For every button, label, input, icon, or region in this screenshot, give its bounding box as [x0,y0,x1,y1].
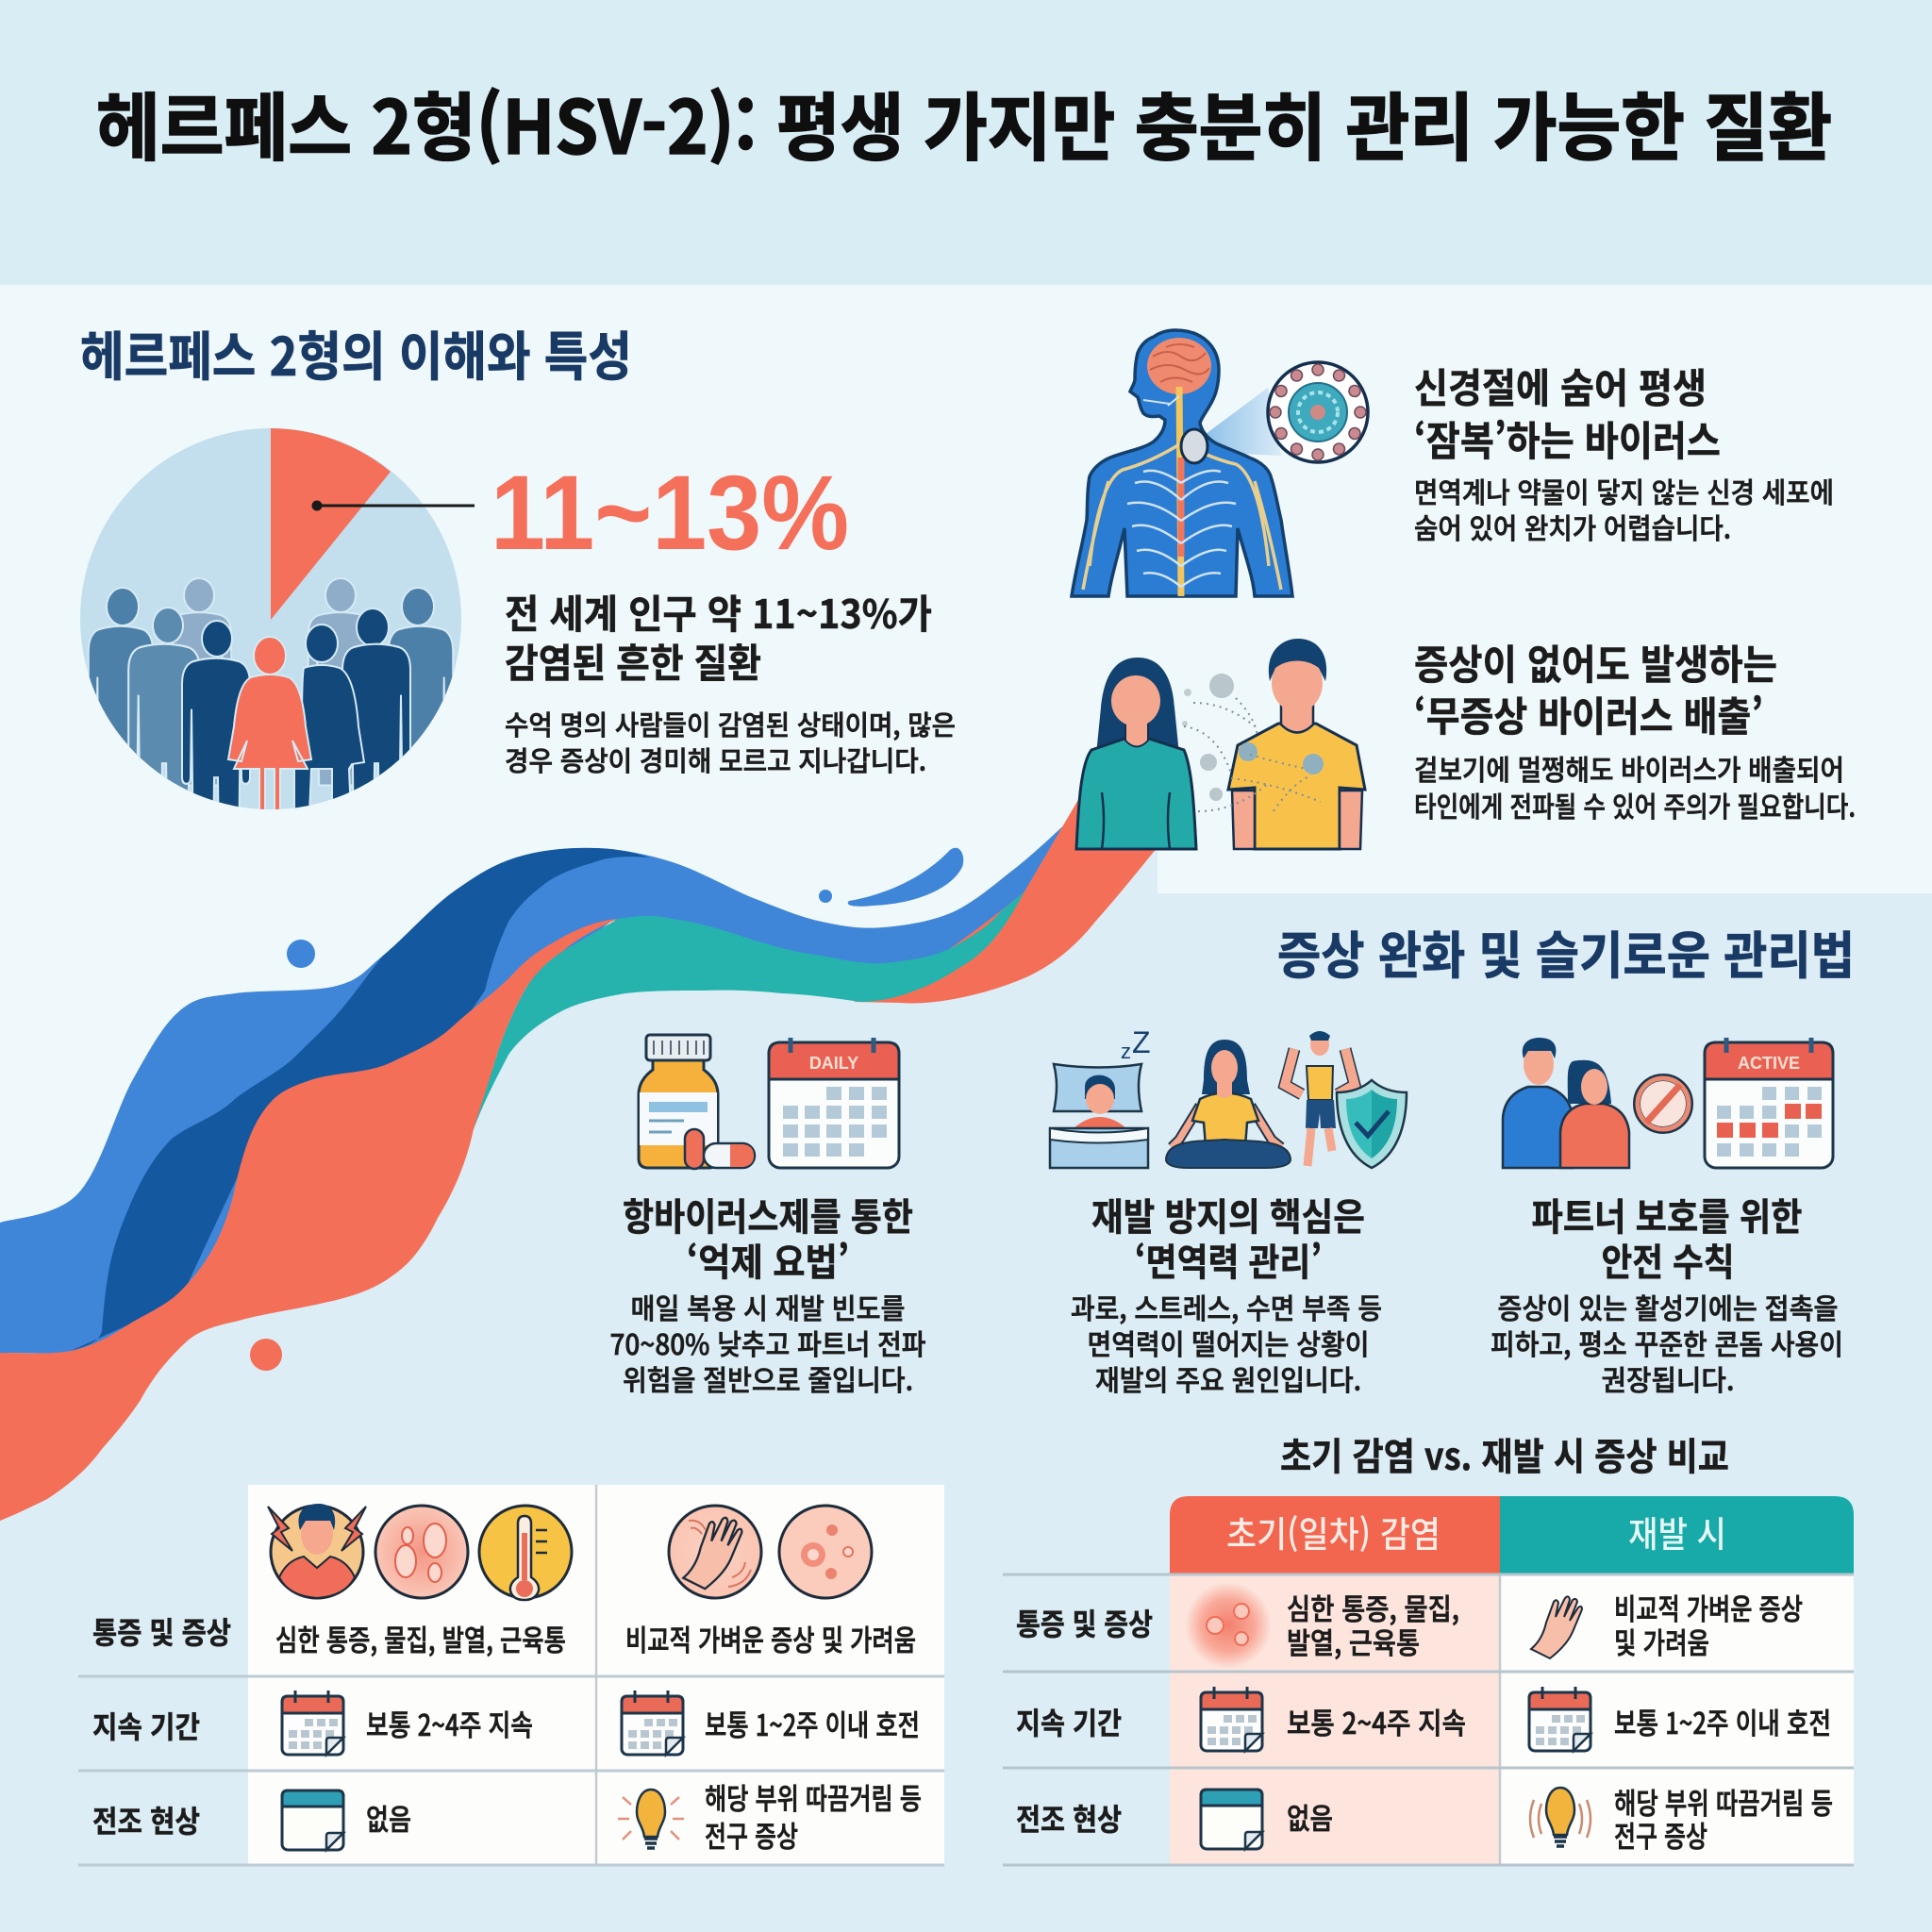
card: suppressive therapy [609,1187,926,1399]
cell texts: 전구 증상 [1614,1813,1707,1856]
pie chart with people [80,428,475,809]
woman [1076,658,1196,849]
icon: calendar, recurrence [622,1690,683,1755]
text block: latent virus [1414,357,1834,547]
header: first infection: 초기(일차) 감염 [1226,1506,1441,1557]
row labels: 전조 현상 [1016,1796,1122,1840]
card: partner safety [1491,1187,1843,1399]
icon: bulb with waves [1530,1788,1591,1846]
card: partner safety: 안전 수칙 [1602,1232,1734,1287]
decorative dot: coral [250,1339,282,1371]
icon: bulb with rays [618,1790,684,1848]
text block: latent virus: 숨어 있어 완치가 어렵습니다. [1414,506,1731,547]
icon: sleeping person: z [1121,1040,1131,1063]
cell texts: 발열, 근육통 [1287,1620,1420,1662]
card: suppressive therapy: 위험을 절반으로 줄입니다. [623,1357,913,1399]
text block: prevalence [505,583,956,779]
decorative droplet [848,848,963,907]
card: suppressive therapy: 매일 복용 시 재발 빈도를 [630,1286,906,1327]
virus magnifier [1268,362,1368,462]
row labels [92,1609,231,1841]
icon: couple [1503,1038,1629,1168]
swoosh: teal band [474,891,1024,1129]
cell texts: 없음 [1287,1795,1333,1838]
spinal cord and nerves [1179,387,1181,596]
text block: latent virus: 신경절에 숨어 평생 [1414,357,1707,415]
card: immunity management: 재발의 주요 원인입니다. [1095,1357,1361,1399]
cell texts: 보통 2~4주 지속 [366,1702,533,1744]
cell texts: 없음 [366,1796,411,1839]
cell texts: 비교적 가벼운 증상 [1614,1586,1803,1628]
title: 헤르페스 2형(HSV-2): 평생 가지만 충분히 관리 가능한 질환 [96,70,1832,175]
left comparison table [78,1485,944,1865]
icon: sleeping person [1050,1025,1151,1168]
text block: asymptomatic shedding: 타인에게 전파될 수 있어 주의가 필요합니다. [1414,784,1856,825]
text block: asymptomatic shedding: ‘무증상 바이러스 배출’ [1414,685,1763,743]
icon: itchy hand [669,1506,761,1598]
icon: blank note [282,1790,343,1850]
text block: asymptomatic shedding: 증상이 없어도 발생하는 [1414,633,1777,691]
icon: daily calendar [769,1038,899,1168]
cell texts: 심한 통증, 물집, 발열, 근육통 [275,1617,566,1659]
decorative dot: small blue [819,890,832,903]
header: recurrence [1500,1496,1854,1574]
right comparison table [1003,1496,1854,1865]
cell texts: 비교적 가벼운 증상 및 가려움 [625,1617,916,1659]
text block: prevalence: 경우 증상이 경미해 모르고 지나갑니다. [505,740,926,779]
man [1228,639,1365,849]
icon: no sign [1637,1077,1690,1130]
card: immunity management: 면역력이 떨어지는 상황이 [1087,1322,1370,1363]
icon: blank note [1201,1790,1262,1849]
section heading: management: 증상 완화 및 슬기로운 관리법 [1277,914,1855,989]
illustration: asymptomatic shedding [1076,639,1365,849]
header: first infection [1170,1496,1500,1574]
row labels: 통증 및 증상 [1016,1601,1153,1644]
card: immunity management [1071,1187,1382,1399]
row labels: 통증 및 증상 [92,1609,231,1653]
text block: prevalence: 전 세계 인구 약 11~13%가 [505,583,932,641]
lower panel background [0,830,1932,1932]
decorative dot: blue [287,940,315,968]
text block: asymptomatic shedding: 겉보기에 멀쩡해도 바이러스가 배출되어 [1414,747,1844,789]
cell backgrounds [1170,1574,1500,1865]
icon: medicine bottle and pills [639,1035,755,1169]
card: suppressive therapy: ‘억제 요법’ [687,1232,849,1287]
table background [248,1485,944,1865]
icon: meditating person [1166,1040,1291,1168]
swoosh ribbon [0,774,1189,1521]
callout beam [1200,388,1281,456]
big number: 11~13% [491,454,849,572]
card: partner safety: 파트너 보호를 위한 [1532,1187,1802,1241]
text block: prevalence: 수억 명의 사람들이 감염된 상태이며, 많은 [505,704,956,743]
text block: latent virus: 면역계나 약물이 닿지 않는 신경 세포에 [1414,470,1834,511]
icon: strong person [1285,1031,1355,1166]
row labels: 전조 현상 [92,1798,200,1841]
card: partner safety: 증상이 있는 활성기에는 접촉을 [1498,1286,1838,1327]
row labels: 지속 기간 [92,1704,200,1747]
text block: asymptomatic shedding [1414,633,1856,825]
icon: mild spots [779,1506,872,1598]
section heading: understanding: 헤르페스 2형의 이해와 특성 [80,315,632,391]
icon: blisters [375,1506,468,1598]
text block: latent virus: ‘잠복’하는 바이러스 [1414,409,1721,468]
cell texts: 해당 부위 따끔거림 등 [705,1775,922,1818]
cell texts: 및 가려움 [1614,1620,1709,1662]
row labels: 지속 기간 [1016,1700,1122,1743]
icon: thermometer [479,1506,572,1600]
ganglion lens [1181,429,1208,463]
illustration: nervous system with virus [1072,330,1368,596]
icon: sleeping person: Z [1132,1025,1151,1059]
highlighted infected person [228,637,311,813]
ribs [1127,471,1236,587]
cell texts: 보통 1~2주 이내 호전 [705,1702,920,1744]
brain [1147,338,1211,394]
cell texts: 보통 2~4주 지속 [1287,1700,1466,1742]
card: suppressive therapy: 70~80% 낮추고 파트너 전파 [609,1322,926,1363]
card: immunity management: 재발 방지의 핵심은 [1091,1187,1365,1241]
cell texts [275,1617,922,1856]
text block: prevalence: 감염된 흔한 질환 [505,632,761,690]
card: immunity management: 과로, 스트레스, 수면 부족 등 [1071,1286,1382,1327]
virus particles and dotted arcs [1182,674,1324,811]
card: immunity management: ‘면역력 관리’ [1135,1232,1322,1287]
swoosh: main coral band [0,919,618,1521]
row labels [1016,1601,1153,1840]
cell texts: 보통 1~2주 이내 호전 [1614,1700,1831,1742]
icon: calendar, first infection [282,1690,343,1755]
cell texts: 심한 통증, 물집, [1287,1586,1459,1628]
comparison heading: 초기 감염 vs. 재발 시 증상 비교 [1280,1426,1729,1481]
card: partner safety: 피하고, 평소 꾸준한 콘돔 사용이 [1491,1322,1843,1363]
icon: active calendar: ACTIVE [1738,1054,1800,1073]
crowd of people [88,577,454,809]
icon: hand [1531,1596,1582,1658]
pie slice 11~13% [271,428,391,620]
swoosh: light blue band [0,774,1110,1354]
pie background [80,428,461,809]
body silhouette [1072,330,1292,596]
icon: active calendar [1705,1038,1833,1168]
header: recurrence: 재발 시 [1628,1506,1726,1557]
card: suppressive therapy: 항바이러스제를 통한 [623,1187,913,1241]
pointer line [311,500,475,511]
icon: calendar, recurrence [1529,1687,1591,1751]
cell texts [1287,1586,1833,1856]
icon: pain person [268,1504,366,1598]
cell texts: 전구 증상 [705,1813,798,1856]
icon: blister patch [1185,1582,1272,1669]
icon: shield [1337,1080,1407,1168]
icon: calendar, first infection [1201,1687,1262,1751]
card: partner safety: 권장됩니다. [1602,1357,1734,1399]
cell texts: 해당 부위 따끔거림 등 [1614,1780,1833,1823]
icon: daily calendar: DAILY [809,1054,858,1073]
title band [0,0,1932,285]
swoosh: dark blue band [71,848,649,1351]
swoosh: right coral band [854,798,1189,1003]
